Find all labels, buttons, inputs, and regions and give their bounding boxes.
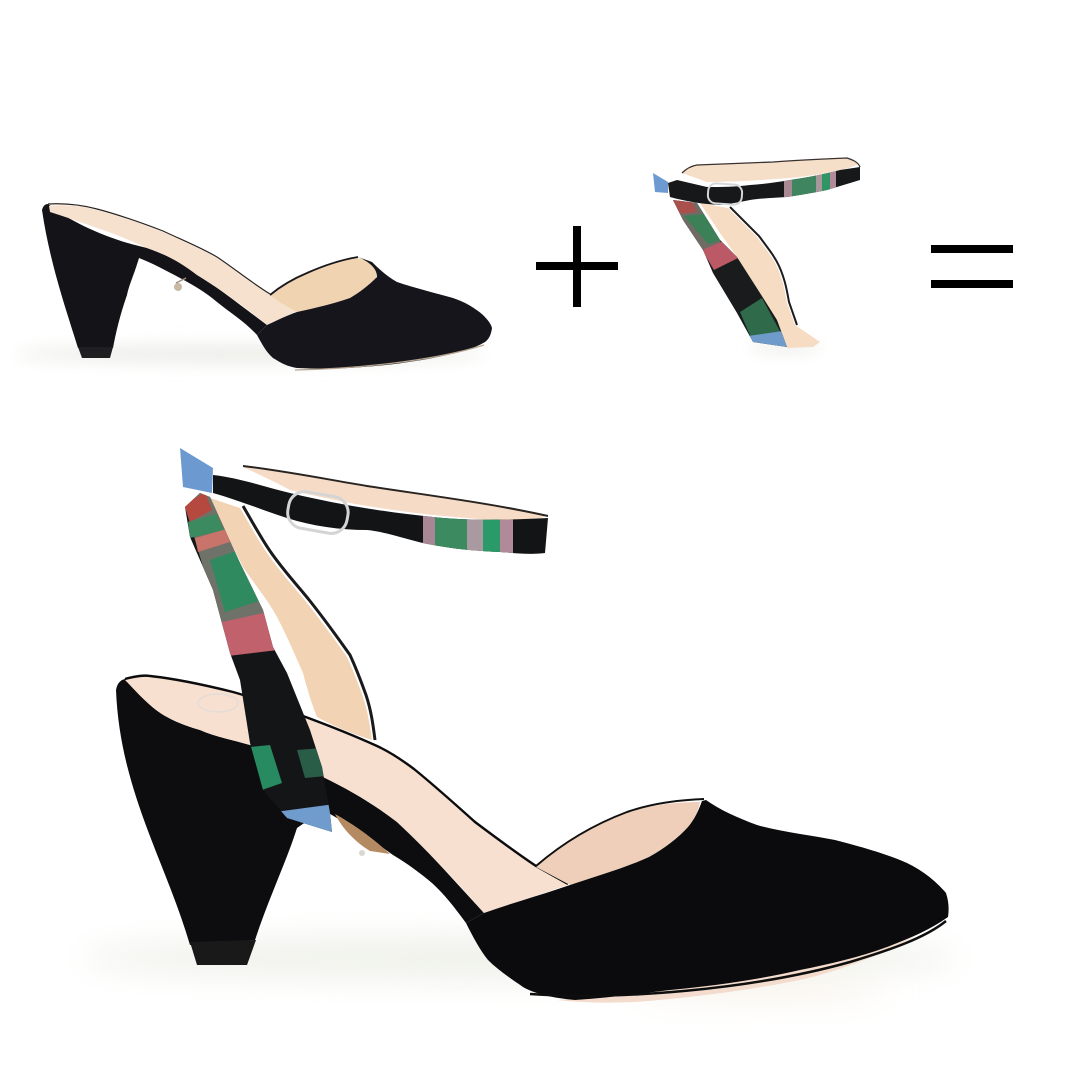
heel tip: [190, 940, 256, 965]
heel and band: [116, 679, 484, 945]
back tab: [653, 173, 668, 193]
fabric vertical: [185, 493, 332, 832]
lining outer edge: [730, 207, 797, 325]
large combined shoe: [80, 448, 960, 1003]
inner rim: [682, 158, 860, 173]
vamp: [466, 800, 949, 1000]
sole edge: [295, 345, 484, 370]
pin: [359, 850, 365, 856]
lining: [536, 802, 700, 885]
plus sign: [536, 226, 618, 307]
strap inner: [243, 467, 547, 522]
toe shadow: [630, 982, 890, 998]
strap lining edge: [243, 506, 375, 740]
shadow: [80, 938, 960, 978]
lining vertical: [700, 203, 820, 348]
brand mark: [198, 694, 238, 712]
shadow: [15, 345, 485, 363]
insole: [49, 205, 297, 325]
heel and band: [42, 204, 267, 348]
strap lining vertical: [210, 498, 372, 740]
horizontal strap: [668, 167, 860, 205]
strap inner rim: [243, 466, 548, 516]
equals sign: [931, 245, 1013, 288]
lining: [270, 258, 376, 312]
sole: [557, 922, 940, 1003]
buckle: [707, 183, 743, 205]
insole binding: [125, 676, 568, 884]
heel tip: [78, 347, 113, 358]
small strap: [653, 158, 865, 355]
rand: [530, 921, 946, 996]
shank detail: [335, 814, 390, 854]
horizontal strap: [213, 475, 548, 554]
lining edge: [536, 799, 704, 866]
small mule shoe: [15, 204, 492, 370]
insole: [125, 677, 568, 913]
vamp: [257, 257, 492, 369]
shadow: [749, 343, 821, 351]
buckle: [285, 489, 351, 536]
top inner: [682, 158, 857, 182]
fabric vertical: [673, 200, 787, 347]
infographic canvas: [39, 157, 1013, 1004]
top binding: [48, 204, 270, 294]
lining edge: [270, 257, 358, 295]
back tab: [180, 448, 213, 493]
pin: [174, 278, 186, 291]
